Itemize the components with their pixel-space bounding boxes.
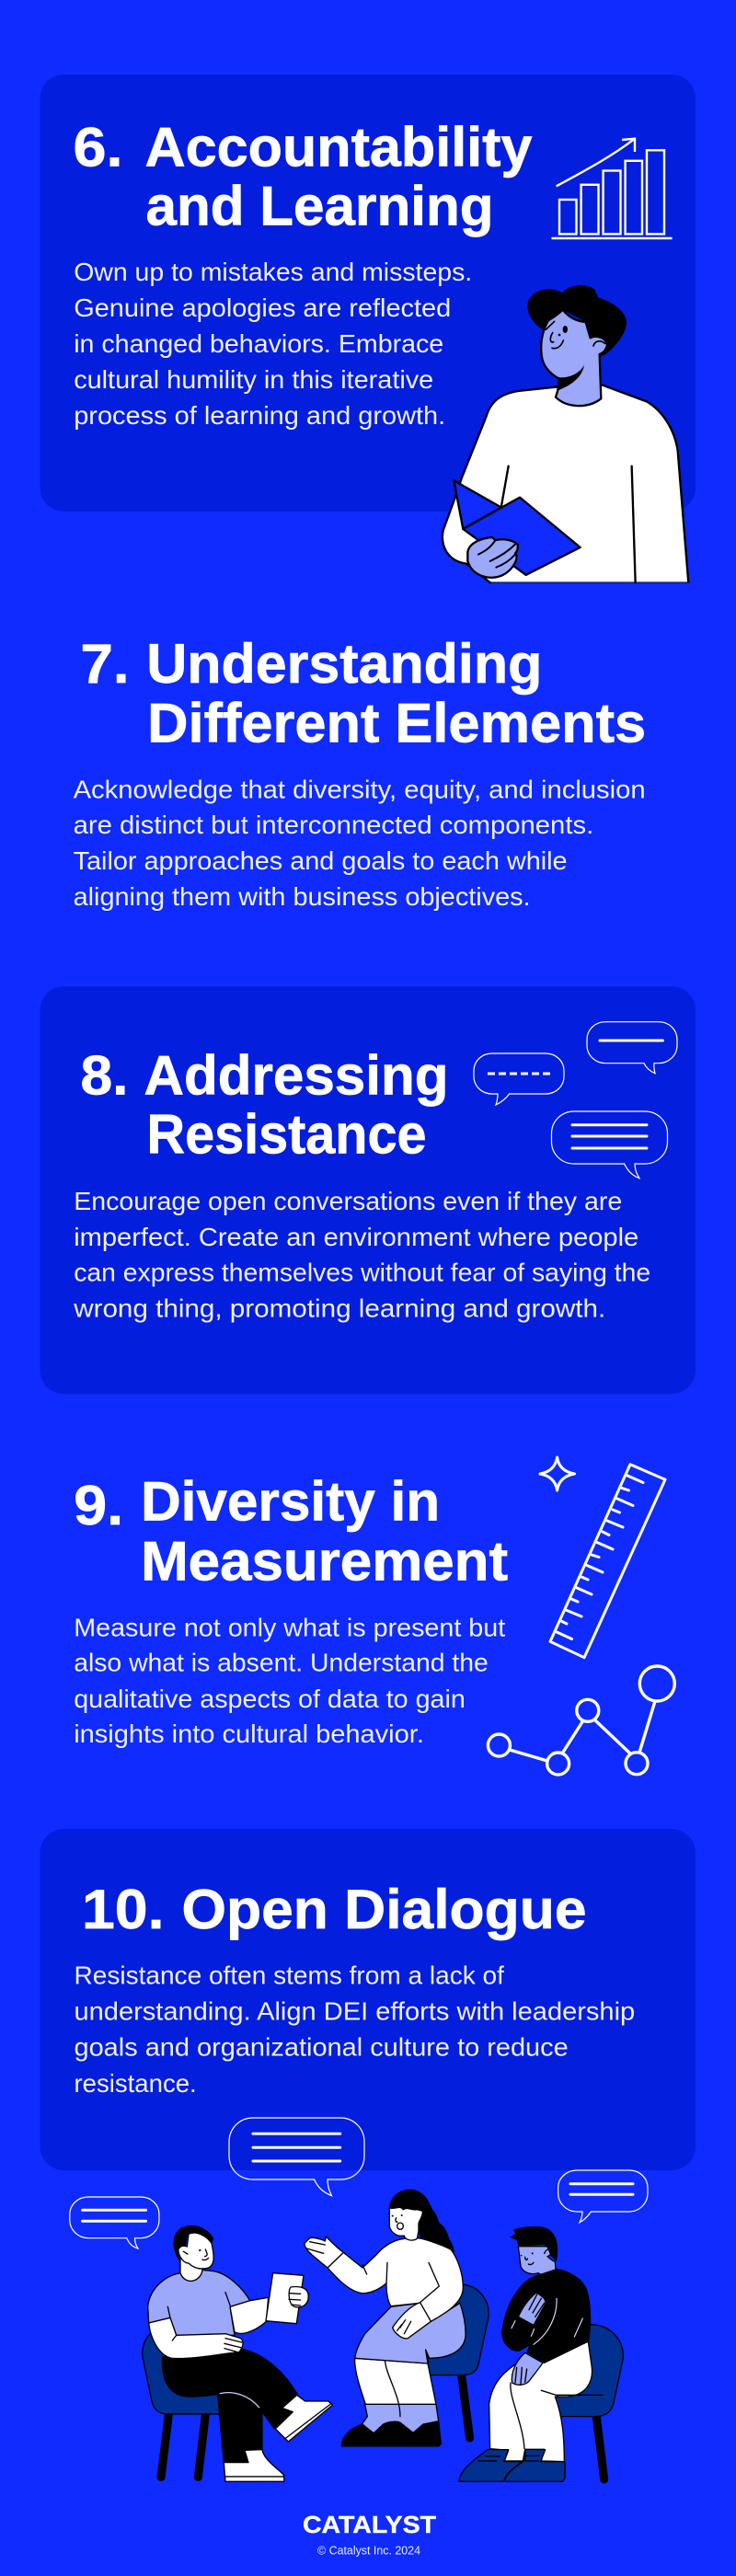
icon: sparkle star <box>540 1457 574 1490</box>
icon: rising bar chart <box>552 139 673 238</box>
icon: center speech bubble <box>229 2118 364 2196</box>
figure: seated woman gesturing <box>305 2190 489 2446</box>
heading: 7 <box>81 633 646 754</box>
heading: 9: 9. <box>74 1475 123 1536</box>
text block: 8 body: imperfect. Create an environment where people <box>74 1223 638 1251</box>
icon: ruler <box>550 1465 665 1658</box>
text block: 6 body <box>74 258 472 430</box>
heading: 10: Open Dialogue <box>182 1879 587 1940</box>
heading: 8: 8. <box>81 1044 129 1106</box>
copyright line: © Catalyst Inc. 2024 <box>317 2543 420 2558</box>
section: 9 diversity in measurement <box>74 1457 674 1775</box>
figure: seated man with hand on chest <box>459 2226 623 2481</box>
text block: 8 body: wrong thing, promoting learning and growth. <box>73 1294 605 1323</box>
text block: 8 body: Encourage open conversations even if they are <box>74 1187 622 1215</box>
text block: 6 body: in changed behaviors. Embrace <box>74 329 443 358</box>
heading: 6 <box>74 116 533 237</box>
heading: 8: Addressing <box>144 1044 449 1106</box>
text block: 10 body: Resistance often stems from a lack of <box>75 1961 504 1990</box>
text block: 7 body: Acknowledge that diversity, equity, and inclusion <box>74 775 646 803</box>
heading: 9: Diversity in <box>141 1471 440 1533</box>
heading: 7: Understanding <box>146 633 542 695</box>
text block: 9 body: qualitative aspects of data to gain <box>74 1685 466 1713</box>
text block: 7 body: are distinct but interconnected components. <box>74 811 593 839</box>
text block: 6 body: cultural humility in this iterative <box>74 365 433 394</box>
figure: seated man with paper <box>143 2225 333 2481</box>
heading: 10: 10. <box>82 1879 164 1940</box>
panel: 10 open dialogue <box>40 1829 696 2170</box>
text block: 10 body: goals and organizational culture to reduce <box>75 2032 569 2061</box>
text block: 8 body: can express themselves without fear of saying the <box>74 1259 650 1287</box>
panel: 8 addressing resistance <box>40 986 696 1394</box>
icon: speech bubble dashed <box>474 1053 564 1105</box>
heading: 6: 6. <box>74 116 123 178</box>
icon: left speech bubble <box>70 2197 159 2248</box>
text block: 7 body: aligning them with business objectives. <box>74 882 531 911</box>
heading: 6: and Learning <box>145 175 493 237</box>
icon: speech bubble three lines <box>552 1111 668 1179</box>
icon: line graph with nodes <box>488 1666 674 1775</box>
heading: 9: Measurement <box>141 1531 508 1593</box>
illustration: man holding book <box>443 285 690 584</box>
heading: 7: Different Elements <box>147 693 646 754</box>
text block: 7 body: Tailor approaches and goals to each while <box>74 846 568 875</box>
icon: speech bubble one line <box>587 1022 677 1074</box>
text block: 6 body: process of learning and growth. <box>74 401 445 430</box>
text block: 10 body <box>74 1961 635 2098</box>
text block: 6 body: Genuine apologies are reflected <box>74 293 451 322</box>
text block: 8 body <box>73 1187 650 1323</box>
heading: 8: Resistance <box>147 1103 427 1165</box>
text block: 9 body: also what is absent. Understand the <box>74 1649 489 1677</box>
heading: 7: 7. <box>81 633 129 695</box>
panel: 6 accountability and learning <box>40 75 696 584</box>
text block: 9 body: insights into cultural behavior. <box>74 1719 424 1748</box>
text block: 10 body: understanding. Align DEI efforts with leadership <box>75 1997 635 2026</box>
logo: catalyst wordmark: CATALYST <box>303 2511 436 2538</box>
section: 7 understanding different elements <box>74 633 646 911</box>
heading: 6: Accountability <box>145 116 533 178</box>
text block: 10 body: resistance. <box>75 2069 197 2098</box>
text block: 9 body: Measure not only what is present but <box>74 1613 505 1641</box>
text block: 9 body <box>74 1613 505 1748</box>
heading: 8 <box>81 1044 449 1165</box>
illustration: group conversation <box>70 2118 648 2481</box>
text block: 7 body <box>74 775 646 911</box>
heading: 9 <box>74 1471 508 1593</box>
text block: 6 body: Own up to mistakes and missteps. <box>74 258 472 286</box>
icon: right speech bubble <box>558 2170 648 2223</box>
